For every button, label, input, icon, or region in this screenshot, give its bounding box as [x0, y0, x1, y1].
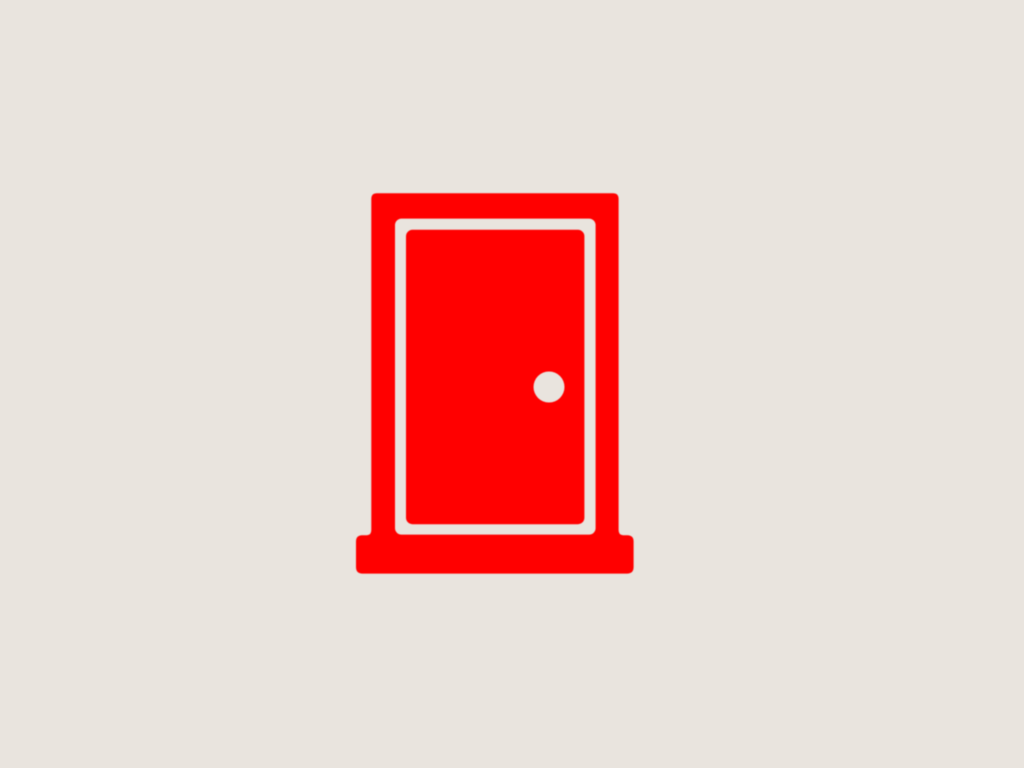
door frame and threshold [356, 193, 634, 574]
door opening outline [395, 219, 596, 535]
door knob [534, 372, 564, 402]
door panel [406, 230, 584, 524]
